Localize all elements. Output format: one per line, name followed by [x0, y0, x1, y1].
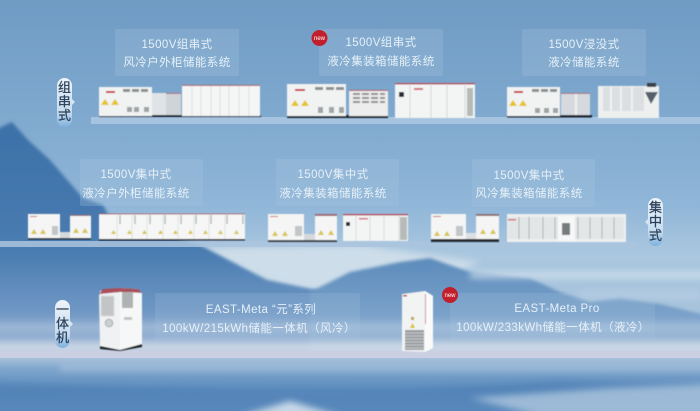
panel: EAST-Meta Yuan series	[155, 293, 360, 342]
shelf: row 2	[0, 241, 637, 247]
equipment: row 1 string liquid-cooled	[287, 83, 475, 118]
panel: 1500V immersion liquid-cooled: 液冷储能系统	[548, 55, 620, 69]
panel: 1500V immersion liquid-cooled: 1500V浸没式	[548, 38, 620, 51]
shelf: row 3	[0, 351, 700, 358]
badge: new (liquid container)	[312, 30, 328, 46]
tag: all-in-one: 机	[56, 330, 69, 345]
badge: new (liquid container): new	[314, 36, 326, 42]
tag: all-in-one	[55, 300, 73, 348]
tag: string type	[57, 78, 75, 127]
panel: 1500V central liquid-cooled outdoor cabinet: 1500V集中式	[100, 167, 172, 181]
panel: EAST-Meta Yuan series: 100kW/215kWh储能一体机（风冷）	[162, 321, 356, 335]
tag: string type: 串	[58, 94, 71, 109]
tag: string type: 式	[58, 108, 71, 123]
shelf: row 1	[91, 117, 700, 124]
panel: EAST-Meta Pro: EAST-Meta Pro	[514, 303, 600, 315]
tag: central type: 中	[649, 214, 662, 229]
equipment: row 1 string air-cooled	[99, 85, 261, 117]
panel: 1500V string air-cooled outdoor cabinet	[115, 29, 239, 76]
panel: 1500V central liquid-cooled container	[276, 159, 399, 206]
panel: 1500V central air-cooled container: 1500V集中式	[493, 168, 565, 182]
equipment: row 1 immersion liquid-cooled	[507, 83, 659, 118]
tag: central type	[645, 198, 663, 246]
panel: 1500V string liquid-cooled container: 液冷集装箱储能系统	[327, 54, 435, 68]
tag: central type: 式	[649, 228, 662, 243]
equipment: row 2 air-cooled container	[431, 214, 626, 242]
panel: 1500V immersion liquid-cooled	[522, 29, 646, 76]
panel: 1500V string liquid-cooled container: 1500V组串式	[345, 35, 417, 49]
panel: EAST-Meta Yuan series: EAST-Meta “元”系列	[206, 302, 316, 316]
panel: 1500V central liquid-cooled outdoor cabinet: 液冷户外柜储能系统	[82, 186, 190, 200]
tag: string type: 组	[58, 80, 71, 95]
badge: new (Meta Pro): new	[444, 293, 456, 299]
panel: 1500V central liquid-cooled container: 液冷集装箱储能系统	[279, 186, 387, 200]
tag: all-in-one: 一	[56, 302, 69, 317]
panel: EAST-Meta Pro: 100kW/233kWh储能一体机（液冷）	[456, 320, 650, 334]
panel: 1500V string air-cooled outdoor cabinet: 1500V组串式	[141, 37, 213, 51]
equipment: row 2 liquid-cooled outdoor cabinet	[28, 214, 245, 240]
equipment: EAST-Meta Yuan cabinet	[99, 288, 142, 351]
equipment: row 2 liquid-cooled container	[268, 214, 408, 242]
panel: 1500V string liquid-cooled container	[319, 29, 443, 76]
tag: central type: 集	[649, 200, 662, 215]
panel: 1500V central liquid-cooled outdoor cabinet	[80, 159, 203, 206]
badge: new (Meta Pro)	[442, 287, 458, 303]
panel: 1500V central liquid-cooled container: 1500V集中式	[297, 167, 369, 181]
panel: 1500V central air-cooled container: 风冷集装箱储能系统	[475, 186, 583, 200]
panel: EAST-Meta Pro	[450, 293, 655, 342]
panel: 1500V string air-cooled outdoor cabinet: 风冷户外柜储能系统	[123, 55, 231, 69]
equipment: EAST-Meta Pro cabinet	[402, 291, 433, 352]
panel: 1500V central air-cooled container	[472, 159, 595, 207]
tag: all-in-one: 体	[56, 316, 69, 331]
